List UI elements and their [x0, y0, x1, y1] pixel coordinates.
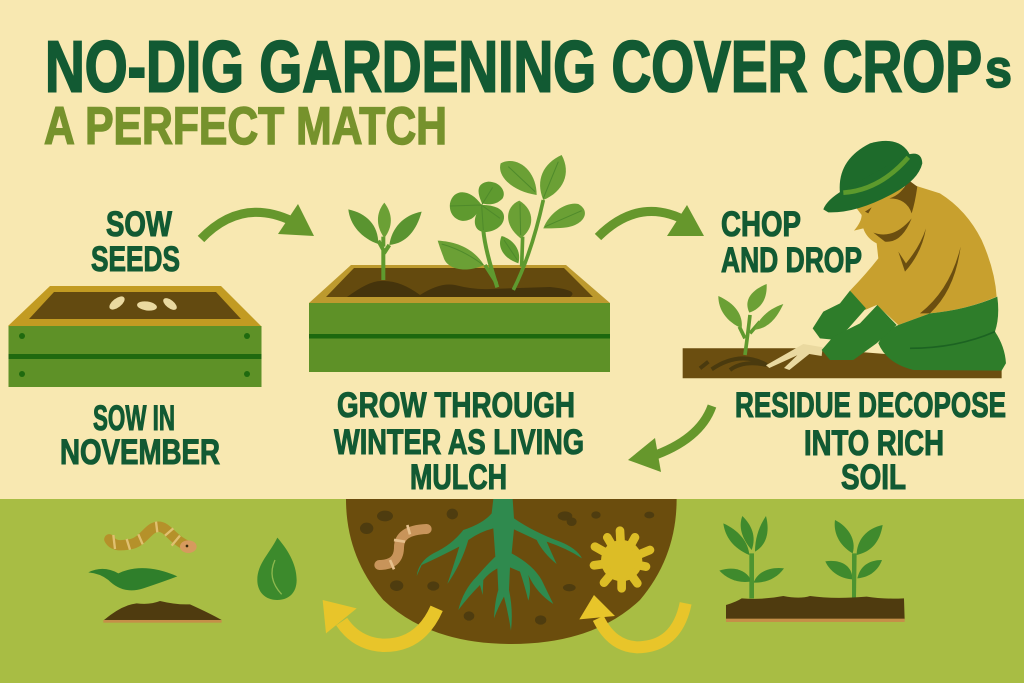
cycle arrow right	[579, 595, 686, 647]
plant right	[825, 520, 883, 598]
label: sow in november: SOW IN	[93, 399, 175, 438]
arrow: grow to chop	[598, 205, 704, 237]
gardener chopping cover crop	[683, 141, 1006, 378]
label: sow seeds	[91, 205, 180, 279]
young plants in rich soil	[719, 516, 905, 622]
worm, leaf and compost pile	[88, 522, 297, 623]
trousers	[878, 297, 1006, 371]
small plant	[718, 284, 783, 355]
soil bed	[726, 596, 905, 619]
label: sow in november	[60, 399, 220, 472]
tool	[766, 344, 823, 370]
seeds	[107, 294, 179, 312]
title: s	[985, 39, 1012, 99]
cycle arrow left	[323, 600, 437, 645]
compost pile	[104, 601, 222, 620]
roots	[417, 499, 582, 631]
shirt and head	[850, 185, 997, 325]
seedling	[348, 203, 422, 280]
ground band	[0, 499, 1024, 683]
label: grow through winter as living mulch: MULCH	[410, 458, 507, 497]
soil particles	[360, 509, 654, 625]
hair	[889, 180, 917, 213]
clover and vetch plants	[438, 155, 585, 290]
arrow: sow to grow	[201, 204, 314, 239]
worm	[379, 525, 427, 569]
label: grow through winter as living mulch: GROW THROUGH	[337, 386, 575, 425]
gloves	[813, 291, 897, 360]
label: residue decompose into rich soil: SOIL	[841, 458, 906, 497]
label: chop and drop	[721, 205, 862, 280]
icon: water drop	[257, 538, 297, 600]
plant left	[719, 516, 784, 598]
label: sow in november: NOVEMBER	[60, 433, 220, 472]
label: grow through winter as living mulch: WINTER AS LIVING	[334, 423, 584, 462]
hat	[823, 141, 922, 212]
label: chop and drop: AND DROP	[721, 241, 862, 280]
raised bed with growing cover crops	[309, 155, 610, 372]
label: residue decompose into rich soil	[735, 386, 1006, 497]
label: grow through winter as living mulch	[334, 386, 584, 497]
arrow: chop to residue	[628, 406, 712, 472]
microbe	[594, 531, 650, 588]
label: sow seeds: SOW	[106, 205, 172, 244]
soil cross-section	[323, 499, 686, 647]
label: sow seeds: SEEDS	[91, 240, 180, 279]
label: residue decompose into rich soil: INTO RICH	[804, 424, 944, 463]
soil strip	[683, 348, 1002, 378]
face and shirt shading	[865, 207, 961, 313]
raised bed with seeds	[8, 286, 262, 387]
subtitle: A PERFECT MATCH	[44, 97, 447, 156]
leaf	[88, 568, 177, 590]
label: chop and drop: CHOP	[721, 205, 801, 244]
worm	[109, 522, 197, 553]
